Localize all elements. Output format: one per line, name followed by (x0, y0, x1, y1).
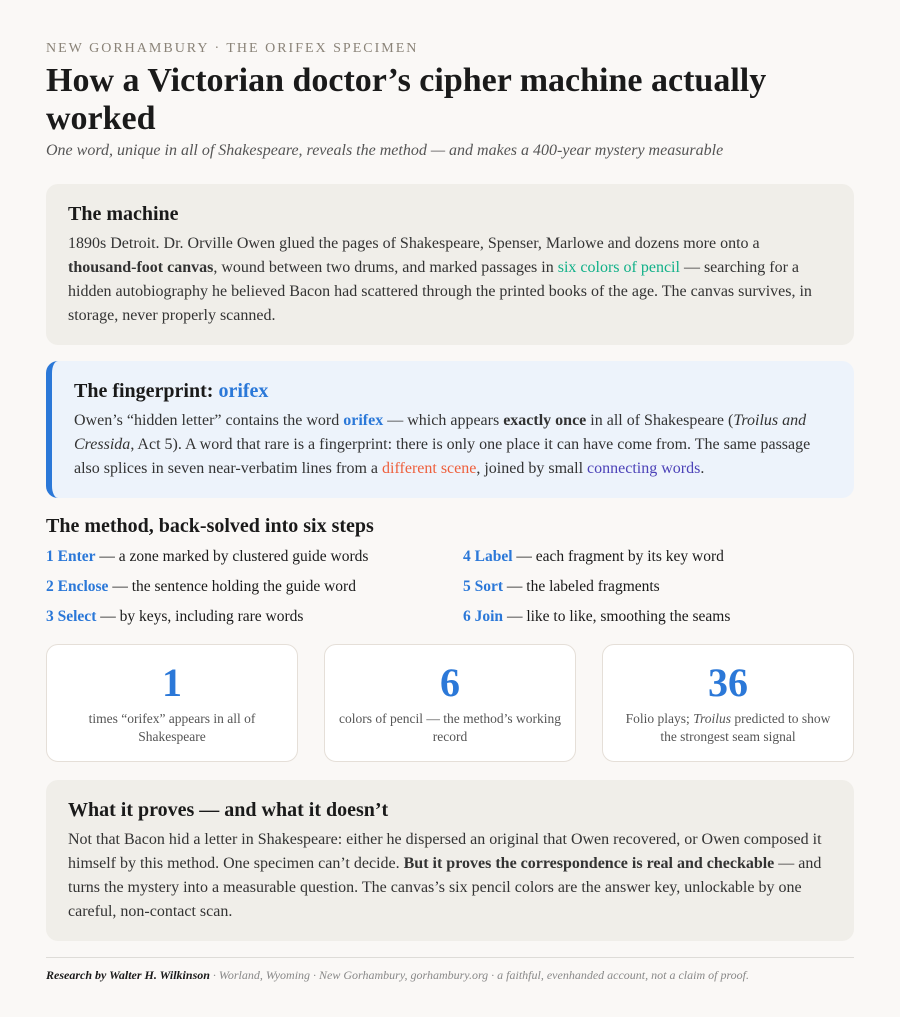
stat: 6: colors of pencil — the method’s working record (339, 711, 561, 744)
list: six steps (46, 548, 730, 625)
text: what it proves: Not that Bacon hid a letter in Shakespeare: either he dispersed an original that Owen recovered, or Owen composed it himself by this method. One specimen can’t decide. But it proves the correspondence is real and checkable — and turns the mystery into a measurable question. The canvas’s six pencil colors are the answer key, unlockable by one careful, non-contact scan. (68, 831, 822, 920)
stat: 36 (602, 644, 854, 762)
stat: 1: times “orifex” appears in all of Shakespeare (89, 711, 255, 744)
step 6: 6 Join — like to like, smoothing the seams (463, 608, 730, 625)
step 4: 4 Label — each fragment by its key word (463, 548, 724, 565)
panel: what it proves (46, 780, 854, 941)
heading: the machine: The machine (68, 203, 179, 225)
panel: the fingerprint (46, 361, 854, 498)
step 1: 1 Enter — a zone marked by clustered guide words (46, 548, 368, 565)
stat: 6: 6 (440, 660, 460, 705)
heading: the method: The method, back-solved into six steps (46, 515, 374, 537)
title: How a Victorian doctor’s cipher machine actually worked (46, 62, 766, 137)
text: the machine: 1890s Detroit. Dr. Orville Owen glued the pages of Shakespeare, Spenser, Marlowe and dozens more onto a thousand-foot canvas, wound between two drums, and marked passages in six colors of pencil — searching for a hidden autobiography he believed Bacon had scattered through the printed books of the age. The canvas survives, in storage, never properly scanned. (68, 235, 812, 324)
stat cards (46, 644, 854, 762)
footer: Research by Walter H. Wilkinson · Worland, Wyoming · New Gorhambury, gorhambury.org · a faithful, evenhanded account, not a claim of proof. (46, 968, 749, 982)
heading: what it proves: What it proves — and what it doesn’t (68, 799, 388, 821)
stat: 36: 36 (708, 660, 748, 705)
text: the fingerprint: Owen’s “hidden letter” contains the word orifex — which appears exactly once in all of Shakespeare (Troilus and Cressida, Act 5). A word that rare is a fingerprint: there is only one place it can have come from. The same passage also splices in seven near-verbatim lines from a different scene, joined by small connecting words. (74, 412, 810, 477)
eyebrow: NEW GORHAMBURY · THE ORIFEX SPECIMEN (46, 41, 418, 56)
stat: 6 (324, 644, 576, 762)
stat: 1: 1 (162, 660, 182, 705)
heading: the fingerprint: The fingerprint: orifex (74, 380, 268, 402)
subtitle: One word, unique in all of Shakespeare, reveals the method — and makes a 400-year mystery measurable (46, 142, 723, 159)
stat: 1 (46, 644, 298, 762)
panel: the machine (46, 184, 854, 345)
step 5: 5 Sort — the labeled fragments (463, 578, 660, 595)
footer (46, 957, 854, 984)
stat: 36: Folio plays; Troilus predicted to show the strongest seam signal (626, 711, 830, 744)
step 3: 3 Select — by keys, including rare words (46, 608, 303, 625)
step 2: 2 Enclose — the sentence holding the guide word (46, 578, 356, 595)
